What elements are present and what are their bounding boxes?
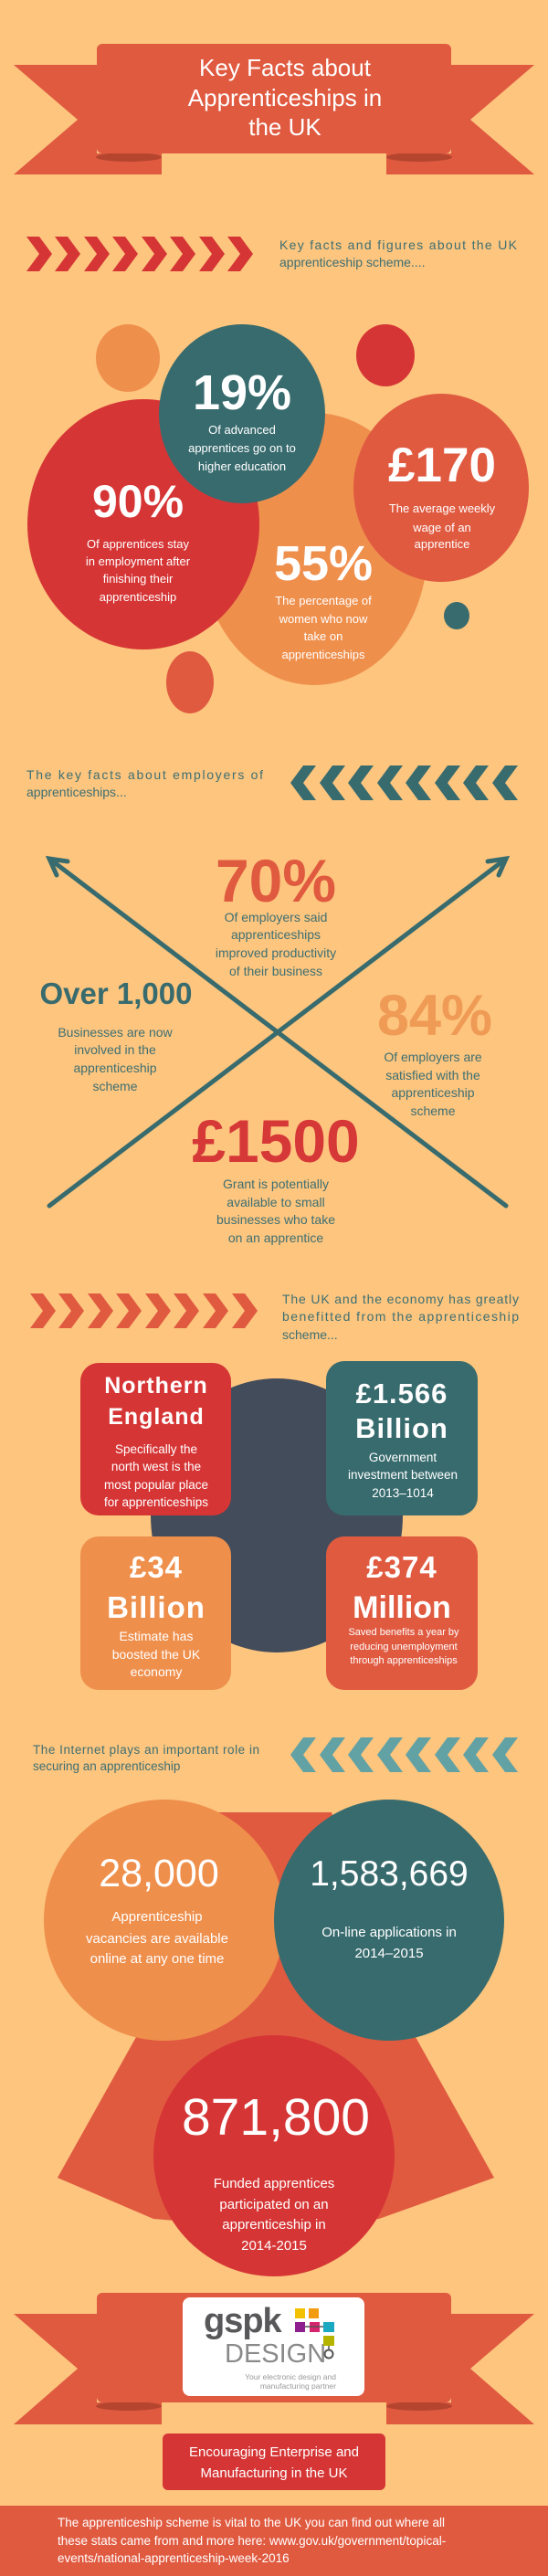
chevrons: orange right <box>30 1293 258 1328</box>
box: £374 Million: £374 <box>366 1550 437 1584</box>
chevrons: light teal left <box>290 1737 518 1772</box>
stat: 84%: satisfied with the <box>385 1068 480 1082</box>
stat: over 1,000 <box>40 977 192 1093</box>
box: £34 Billion: £34 <box>130 1550 183 1584</box>
economy panel <box>80 1361 478 1690</box>
circle: 1,583,669 <box>274 1800 504 2041</box>
bubble: 90%: in employment after <box>86 554 191 568</box>
box: £1.566 Billion: investment between <box>348 1468 458 1482</box>
footer: these stats came from and more here: www.gov.uk/government/topical- <box>58 2534 446 2548</box>
circle: 1,583,669: 1,583,669 <box>310 1854 469 1894</box>
bubble: 90%: 90% <box>92 476 184 527</box>
bubble: 90%: apprenticeship <box>100 590 176 604</box>
tagline box: Encouraging Enterprise and <box>189 2444 359 2460</box>
logo: gspk design: Your electronic design and <box>245 2372 336 2381</box>
footer: events/national-apprenticeship-week-2016 <box>58 2551 290 2565</box>
stat: over 1,000: apprenticeship <box>73 1061 157 1075</box>
intro text: apprenticeship scheme.... <box>279 255 426 269</box>
internet intro text <box>33 1743 259 1773</box>
stat: over 1,000: Businesses are now <box>58 1025 174 1040</box>
central dark circle <box>151 1378 403 1652</box>
bubble: 90%: finishing their <box>103 572 174 586</box>
box: Northern England <box>80 1363 231 1515</box>
stat: 70% <box>216 847 336 978</box>
circle: 28,000: vacancies are available <box>86 1931 228 1947</box>
footer <box>0 2506 548 2576</box>
stat: £1500: on an apprentice <box>228 1230 323 1245</box>
stat: over 1,000: Over 1,000 <box>40 977 192 1010</box>
stat: 84% <box>377 984 492 1118</box>
bubble: 19%: 19% <box>193 365 291 420</box>
bubble: 19%: apprentices go on to <box>188 441 296 455</box>
stat: 84%: 84% <box>377 984 492 1048</box>
box: £34 Billion: economy <box>131 1664 182 1679</box>
internet panel <box>44 1800 504 2276</box>
box: £34 Billion: Estimate has <box>120 1629 193 1643</box>
stat: 84%: scheme <box>410 1103 456 1118</box>
bubble: 19%: higher education <box>198 459 286 473</box>
employers intro text <box>26 767 263 799</box>
circle: 871,800: 2014-2015 <box>241 2238 307 2254</box>
title banner <box>14 44 534 174</box>
stat: £1500 <box>192 1107 360 1245</box>
circle: 871,800: apprenticeship in <box>222 2217 326 2233</box>
bubble: 90%: Of apprentices stay <box>87 537 189 551</box>
box: £34 Billion: boosted the UK <box>112 1647 201 1662</box>
bubble cluster <box>27 324 529 713</box>
title text <box>188 54 382 141</box>
bubble: £170: apprentice <box>415 537 469 551</box>
economy intro text: benefitted from the apprenticeship <box>282 1309 519 1324</box>
box: £1.566 Billion: Government <box>369 1451 437 1464</box>
logo: gspk design: DESIGN <box>225 2339 326 2369</box>
intro text <box>279 238 518 269</box>
stat: 70%: improved productivity <box>216 945 336 960</box>
stat: 70%: 70% <box>216 847 336 914</box>
box: Northern England: north west is the <box>111 1460 201 1473</box>
bubble: 55%: The percentage of <box>275 594 372 607</box>
circle: 871,800 <box>153 2035 395 2276</box>
bubble: 19%: Of advanced <box>208 423 276 437</box>
bubble: 55% <box>201 413 427 685</box>
bubble: £170 <box>353 394 529 582</box>
stat: 84%: apprenticeship <box>391 1085 475 1100</box>
box: £1.566 Billion <box>326 1361 478 1515</box>
bubble: 55%: take on <box>304 629 342 643</box>
box: £374 Million: through apprenticeships <box>350 1655 458 1666</box>
decorative bubbles <box>96 324 469 713</box>
box: £1.566 Billion: Billion <box>355 1412 448 1444</box>
footer: The apprenticeship scheme is vital to the UK you can find out where all <box>58 2516 445 2529</box>
box: £374 Million: Million <box>353 1590 451 1625</box>
box: Northern England: Northern <box>104 1373 208 1399</box>
employers intro text: The key facts about employers of <box>26 767 263 782</box>
box: £374 Million <box>326 1536 478 1690</box>
box: Northern England: for apprenticeships <box>104 1495 208 1509</box>
box: £1.566 Billion: £1.566 <box>356 1378 448 1409</box>
stat: over 1,000: involved in the <box>74 1042 156 1057</box>
circle: 28,000 <box>44 1800 285 2041</box>
economy intro text <box>282 1292 519 1342</box>
chevrons: red right <box>26 237 253 271</box>
logo: gspk design <box>183 2297 364 2396</box>
box: Northern England: Specifically the <box>115 1442 197 1456</box>
bubble: 90% <box>27 399 259 649</box>
stat: £1500: £1500 <box>192 1107 360 1175</box>
tagline box <box>163 2433 385 2490</box>
bubble: 19% <box>159 324 325 503</box>
circle: 28,000: online at any one time <box>90 1951 224 1967</box>
bubble: £170: The average weekly <box>389 501 496 515</box>
bubble: 55%: women who now <box>279 612 368 626</box>
stat: £1500: available to small <box>227 1195 325 1209</box>
box: £374 Million: reducing unemployment <box>350 1642 458 1652</box>
stat: 84%: Of employers are <box>384 1050 482 1064</box>
logo: gspk design: gspk <box>204 2302 283 2340</box>
crossed arrows <box>49 859 506 1206</box>
stat: 70%: apprenticeships <box>231 927 321 942</box>
bubble: 55%: apprenticeships <box>281 648 365 661</box>
internet intro text: The Internet plays an important role in <box>33 1743 259 1757</box>
intro text: Key facts and figures about the UK <box>279 238 518 252</box>
circle: 871,800: participated on an <box>219 2197 329 2212</box>
chevrons: teal left <box>290 765 518 800</box>
logo: gspk design: manufacturing partner <box>260 2381 336 2391</box>
stat: £1500: Grant is potentially <box>223 1177 329 1191</box>
box: £1.566 Billion: 2013–1014 <box>372 1486 434 1500</box>
box: £34 Billion: Billion <box>107 1590 206 1624</box>
circle: 871,800: 871,800 <box>182 2088 370 2147</box>
circle: 1,583,669: On-line applications in <box>321 1925 457 1940</box>
box: £374 Million: Saved benefits a year by <box>348 1627 459 1638</box>
employers intro text: apprenticeships... <box>26 785 127 799</box>
title text: Key Facts about <box>199 54 372 81</box>
title text: Apprenticeships in <box>188 84 382 111</box>
stat: 70%: of their business <box>229 964 322 978</box>
circle: 28,000: Apprenticeship <box>111 1909 203 1925</box>
bubble: 55%: 55% <box>274 536 373 591</box>
box: Northern England: most popular place <box>104 1478 208 1492</box>
bubble: £170: wage of an <box>412 521 471 534</box>
title text: the UK <box>248 113 321 141</box>
economy intro text: scheme... <box>282 1327 338 1342</box>
background funnel shape <box>58 1812 494 2229</box>
economy intro text: The UK and the economy has greatly <box>282 1292 519 1306</box>
logo banner <box>14 2293 534 2424</box>
internet intro text: securing an apprenticeship <box>33 1759 180 1773</box>
box: Northern England: England <box>108 1404 205 1430</box>
circle: 871,800: Funded apprentices <box>214 2176 334 2191</box>
stat: over 1,000: scheme <box>92 1079 138 1093</box>
stat: 70%: Of employers said <box>225 910 327 924</box>
bubble: £170: £170 <box>388 438 496 492</box>
stat: £1500: businesses who take <box>216 1212 335 1227</box>
box: £34 Billion <box>80 1536 231 1690</box>
tagline box: Manufacturing in the UK <box>201 2465 347 2481</box>
circle: 28,000: 28,000 <box>99 1852 219 1895</box>
circle: 1,583,669: 2014–2015 <box>354 1946 424 1961</box>
